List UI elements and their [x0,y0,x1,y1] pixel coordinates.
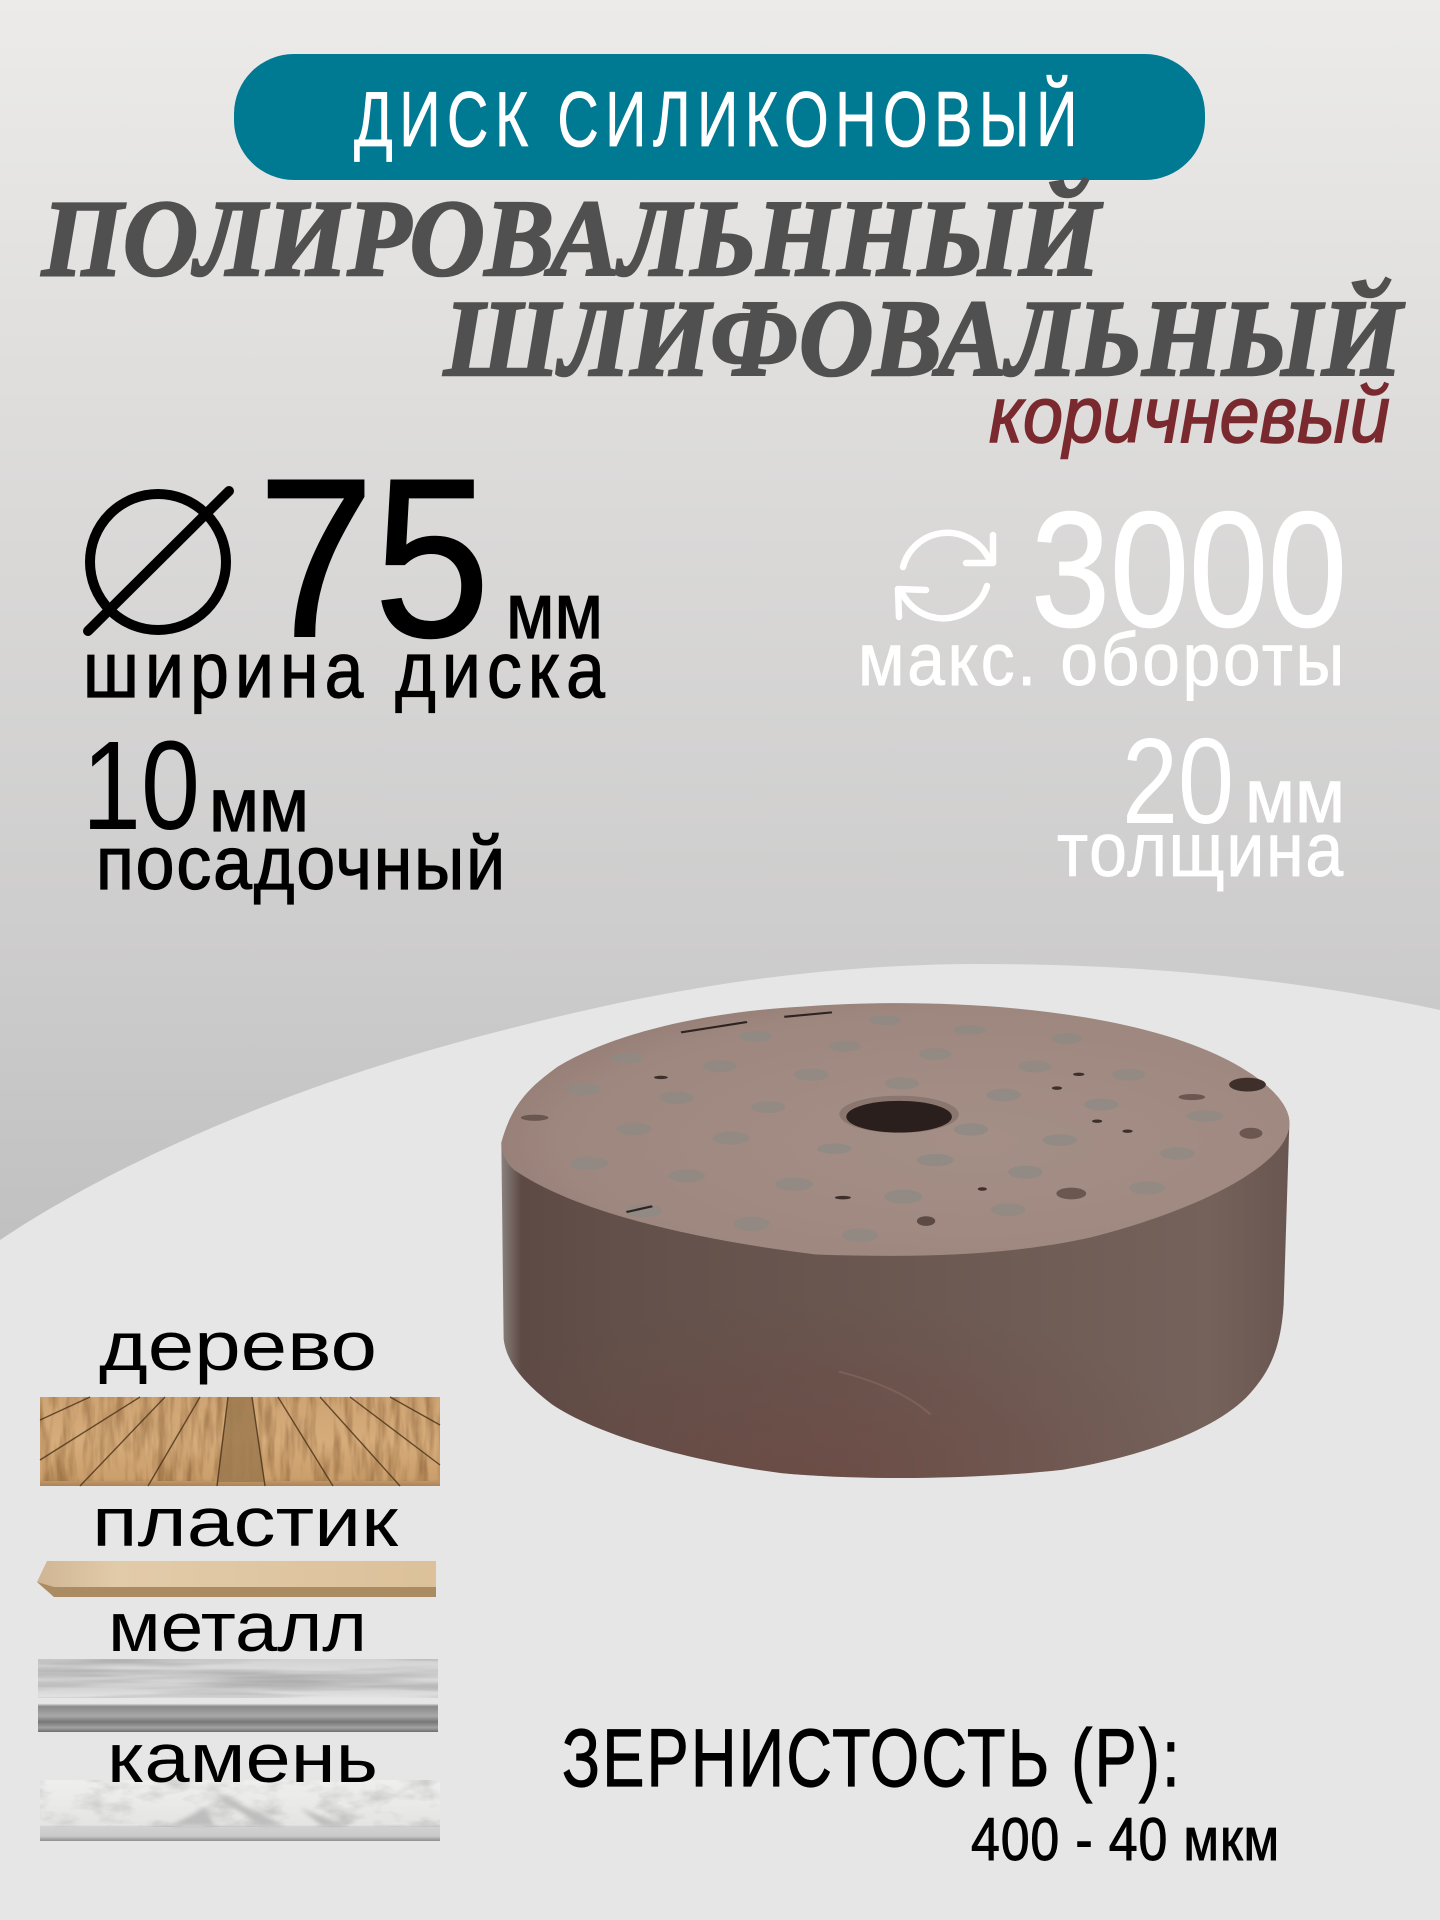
spec: disc diameter [83,431,611,714]
heading: polishing: ПОЛИРОВАЛЬННЫЙ [41,178,1103,299]
metal swatch [38,1659,438,1732]
title pill [234,54,1205,180]
material: stone [40,1719,440,1841]
lower light curved panel [0,964,1440,1920]
thickness value: 20 [1122,713,1234,849]
rpm value: 3000 [1031,478,1347,661]
heading: grinding: ШЛИФОВАЛЬНЫЙ [443,278,1405,399]
spec: thickness [1057,713,1345,893]
arbor caption: посадочный [96,821,507,905]
material: plastic [37,1483,436,1597]
diameter unit: мм [506,566,603,655]
colour subtitle: коричневый [989,370,1390,459]
stone label: камень [107,1719,378,1797]
rpm caption: макс. обороты [858,618,1347,701]
product: silicone disc [501,1003,1290,1478]
grit value: 400 - 40 мкм [971,1806,1280,1873]
icon: diameter symbol [88,491,229,631]
title text: ДИСК СИЛИКОНОВЫЙ [354,75,1084,163]
disc centre hole [839,1096,959,1133]
arbor unit: мм [209,763,309,848]
plastic swatch [37,1561,436,1597]
wood label: дерево [99,1307,377,1385]
thickness unit: мм [1245,754,1345,839]
material: wood [40,1307,440,1486]
spec: arbor hole [82,715,507,905]
grit heading: ЗЕРНИСТОСТЬ (Р): [562,1713,1182,1804]
material: metal [38,1588,438,1732]
stone swatch [40,1780,440,1841]
icon: rotation arrows [898,533,993,618]
diameter value: 75 [258,431,490,684]
metal label: металл [108,1588,367,1666]
background gradient [0,0,1440,1300]
wood swatch [40,1397,440,1486]
spec: max rpm [858,478,1347,701]
arbor value: 10 [82,715,200,856]
plastic label: пластик [92,1483,398,1561]
thickness caption: толщина [1057,808,1345,893]
diameter caption: ширина диска [83,625,611,714]
